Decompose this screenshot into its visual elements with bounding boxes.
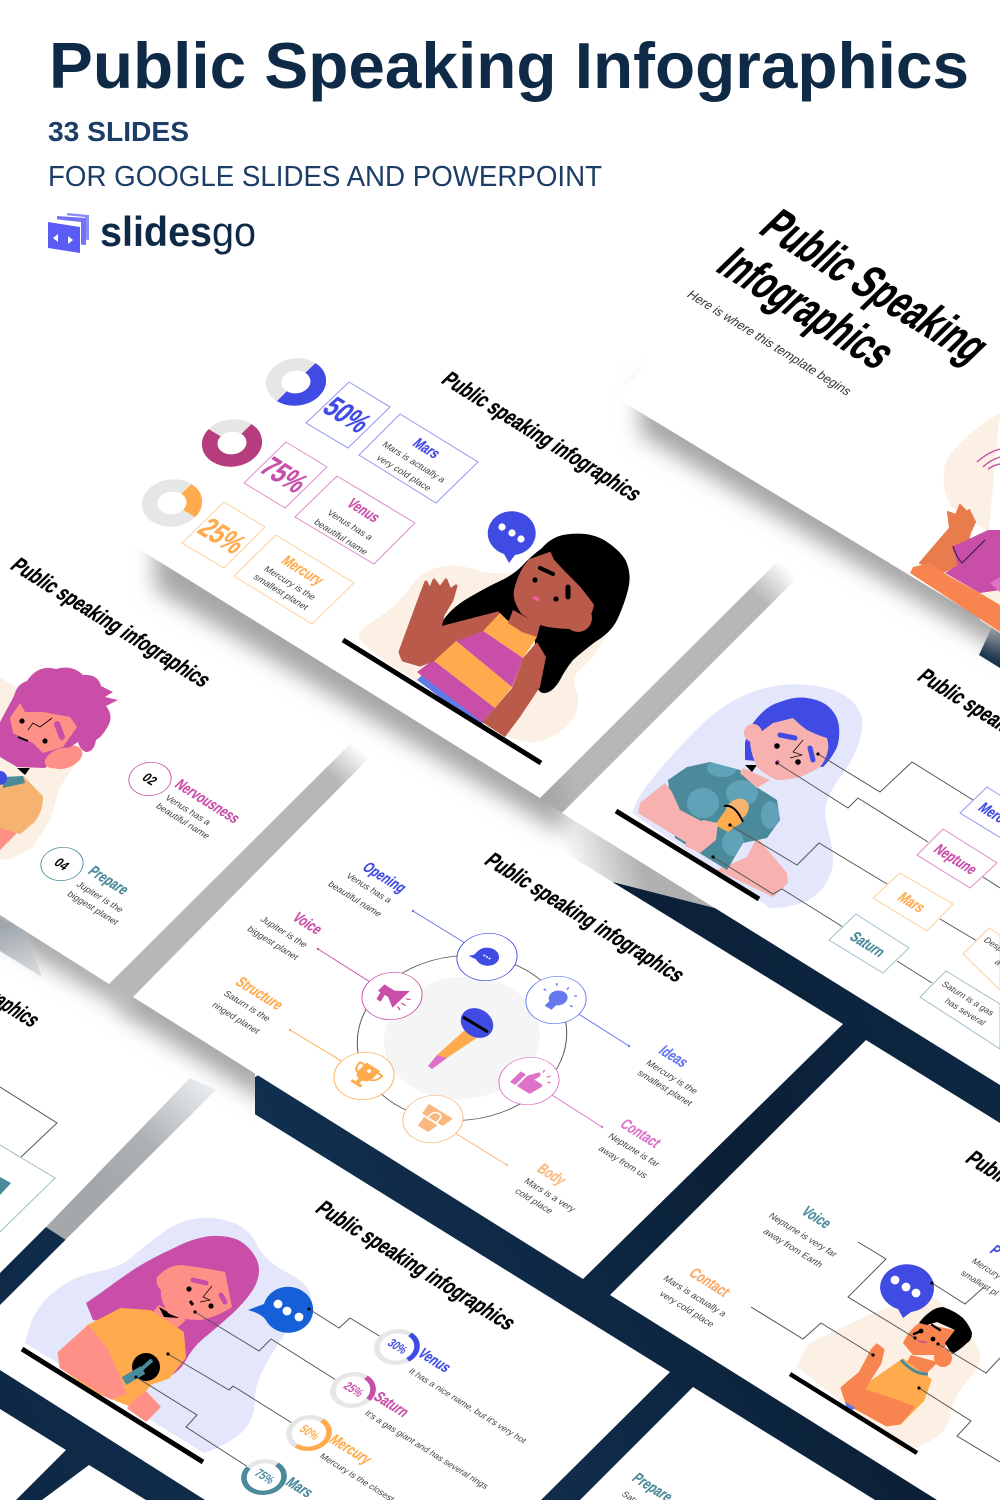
box: Saturn: Saturn (846, 928, 890, 960)
label: Voice: Jupiter is the (258, 915, 310, 949)
label: Contact (657, 1264, 735, 1329)
item 04: Prepare: Prepare (85, 862, 134, 898)
label: Voice (245, 909, 327, 962)
label: Voice: Voice (289, 909, 327, 937)
box: Venus: beautiful name (312, 518, 370, 556)
percent ring 30%: 30% (384, 1337, 410, 1357)
donut chart 75% (201, 418, 263, 468)
box: Neptune (917, 829, 997, 888)
label: Prepare (right side) (959, 1242, 1000, 1297)
slide: percent rings with pink-haired girl (22, 1196, 529, 1500)
label: Body (513, 1160, 578, 1215)
node: Voice (350, 963, 434, 1029)
node: Opening (445, 924, 529, 990)
percent ring 25% (325, 1368, 381, 1412)
box: Mars: Mars (409, 435, 445, 462)
box: Mercury (234, 535, 354, 624)
node: Ideas (514, 967, 598, 1033)
box: Venus: Venus (343, 495, 385, 525)
percent ring 50% (281, 1411, 337, 1455)
icon: speech bubble (248, 1287, 313, 1333)
icon: speech bubble (488, 511, 536, 563)
box: 75% (244, 442, 327, 508)
box: Venus: Venus has a (325, 508, 376, 542)
box: Saturn (829, 914, 909, 973)
percent ring 25%: 25% (340, 1380, 366, 1400)
cover subtitle: Here is where this template begins (684, 288, 856, 398)
box: Mars (873, 873, 953, 931)
slide: numbered list with bearded man (0, 553, 245, 927)
slide: donut percentages with girl (141, 357, 648, 763)
slide heading: Public speaking infographics (5, 553, 217, 691)
cover title line two: Infographics (706, 239, 908, 378)
box: Mars: very cold place (374, 453, 434, 493)
item 02: Nervousness (120, 756, 245, 840)
label: Body: Mars is a very (522, 1176, 578, 1214)
label: Saturn: It's a gas giant and has several rings (363, 1408, 491, 1491)
main title: Public Speaking Infographics (49, 29, 969, 102)
box: Mars description (963, 928, 1000, 990)
box: 25%: 25% (191, 512, 253, 560)
item 02: Nervousness: 02 (139, 770, 161, 788)
percent ring 75%: 75% (251, 1467, 277, 1487)
node: Body (391, 1086, 475, 1152)
donut chart 50% (265, 357, 327, 407)
label: Structure (210, 973, 288, 1036)
connector lines (711, 752, 1000, 983)
label: Opening: beautiful name (326, 880, 384, 918)
illustration: girl with striped top (343, 534, 630, 763)
label: Contact: Contact (686, 1264, 735, 1300)
box: Saturn description (920, 971, 1000, 1049)
logo icon (48, 213, 89, 253)
node: Contact (487, 1048, 571, 1114)
label: Prepare (right side): smallest pl (959, 1268, 1000, 1297)
illustration: girl with pink hair and microphone (22, 1218, 311, 1462)
label: Voice: away from Earth (761, 1227, 825, 1269)
item 04: Prepare (32, 841, 134, 927)
slide: microphone ring diagram (210, 848, 700, 1215)
slide: title cover (684, 201, 1000, 633)
label: Contact: very cold place (657, 1289, 717, 1329)
label: Contact: Contact (617, 1115, 666, 1151)
percent ring 50%: 50% (296, 1423, 322, 1443)
box: 25% (182, 502, 265, 568)
subtitle: compatibility: FOR GOOGLE SLIDES AND POWERPOINT (48, 161, 602, 193)
illustration: bearded man (0, 667, 118, 860)
label: Ideas: Mercury is the (644, 1058, 700, 1096)
box: Mars: Mars is actually a (380, 440, 449, 485)
label: Mars: Mars (282, 1474, 318, 1500)
box: Mercury: smallest planet (251, 572, 311, 612)
box: 50%: 50% (316, 391, 378, 439)
box: Saturn description: Saturn is a gas (940, 979, 997, 1018)
box: Saturn description: has several (943, 996, 988, 1027)
box: 75%: 75% (253, 451, 315, 499)
box: Neptune: Neptune (930, 841, 982, 877)
slide heading: Public speaking infographics (479, 848, 691, 986)
item 04: Prepare: 04 (51, 855, 73, 873)
header block (48, 29, 969, 255)
slide: tree diagram with blue-haired man (616, 664, 1000, 1049)
connector lines (134, 1307, 381, 1467)
label: Venus: Venus (414, 1345, 456, 1375)
item 02: Nervousness: Venus has a (163, 793, 214, 827)
illustration: boy thinking (790, 1297, 980, 1453)
connector lines (751, 1242, 1000, 1462)
box: Mars (359, 414, 478, 503)
box: Mars: Mars (894, 889, 930, 916)
label: Body: Body (533, 1160, 571, 1188)
donut chart 25% (141, 478, 203, 528)
label: Voice: biggest planet (245, 924, 301, 962)
icon: microphone (428, 1002, 499, 1069)
label: Structure: ringed planet (210, 1000, 263, 1036)
box: Mercury (960, 787, 1000, 846)
subtitle: slide count: 33 SLIDES (48, 116, 189, 147)
node: Structure (322, 1043, 406, 1109)
box: Mercury: Mercury (278, 552, 328, 588)
item 04: Prepare: Jupiter is the (74, 880, 126, 914)
slide heading: Public speaking infographics (310, 1196, 522, 1334)
label: Saturn: Saturn (370, 1388, 414, 1420)
label: Voice: Voice (798, 1203, 836, 1231)
ring and centre disc (314, 923, 610, 1153)
label: Contact (596, 1115, 666, 1180)
slide: boy with connected text labels (657, 1146, 1000, 1462)
slide heading: Public speaking infographics (436, 367, 648, 505)
label: Voice: Neptune is very far (767, 1211, 839, 1259)
percent ring 30% (369, 1325, 425, 1369)
label: Opening: Opening (359, 858, 411, 896)
illustration: man with blue hair and microphone (616, 684, 862, 908)
slide: left partial tree (0, 981, 57, 1232)
label: Structure: Structure (232, 973, 288, 1013)
box: Mercury: Mercury is the (262, 564, 318, 602)
slide: bottom partial (620, 1469, 678, 1500)
illustration: speaker waving at cover edge (910, 413, 1000, 633)
spokes (289, 910, 630, 1166)
box: Venus (295, 476, 415, 564)
connector lines and box (0, 1087, 57, 1232)
label: Structure: Saturn is the (221, 989, 273, 1023)
item 02: Nervousness: Nervousness (171, 776, 245, 826)
label: Opening: Venus has a (344, 871, 395, 905)
percent ring 75% (236, 1455, 292, 1499)
label: Ideas (635, 1042, 700, 1108)
icon: speech bubble (880, 1264, 934, 1318)
label: Voice (761, 1203, 839, 1269)
label: Mercury: Mercury (326, 1431, 376, 1467)
label: Ideas: smallest planet (635, 1068, 695, 1108)
item 04: Prepare: biggest planet (65, 889, 121, 927)
label: Ideas: Ideas (655, 1042, 693, 1070)
label: Venus: It has a nice name, but it's very hot (407, 1366, 529, 1445)
label: Opening (326, 858, 411, 918)
box: 50% (306, 382, 390, 448)
logo wordmark: slidesgo (100, 208, 256, 255)
item 02: Nervousness: beautiful name (154, 802, 212, 840)
label: Mercury (318, 1431, 397, 1500)
label: Body: cold place (513, 1187, 555, 1215)
label: Contact: Neptune is far (606, 1131, 662, 1169)
label: Contact: away from us (596, 1144, 650, 1180)
label: Contact: Mars is actually a (661, 1274, 730, 1319)
